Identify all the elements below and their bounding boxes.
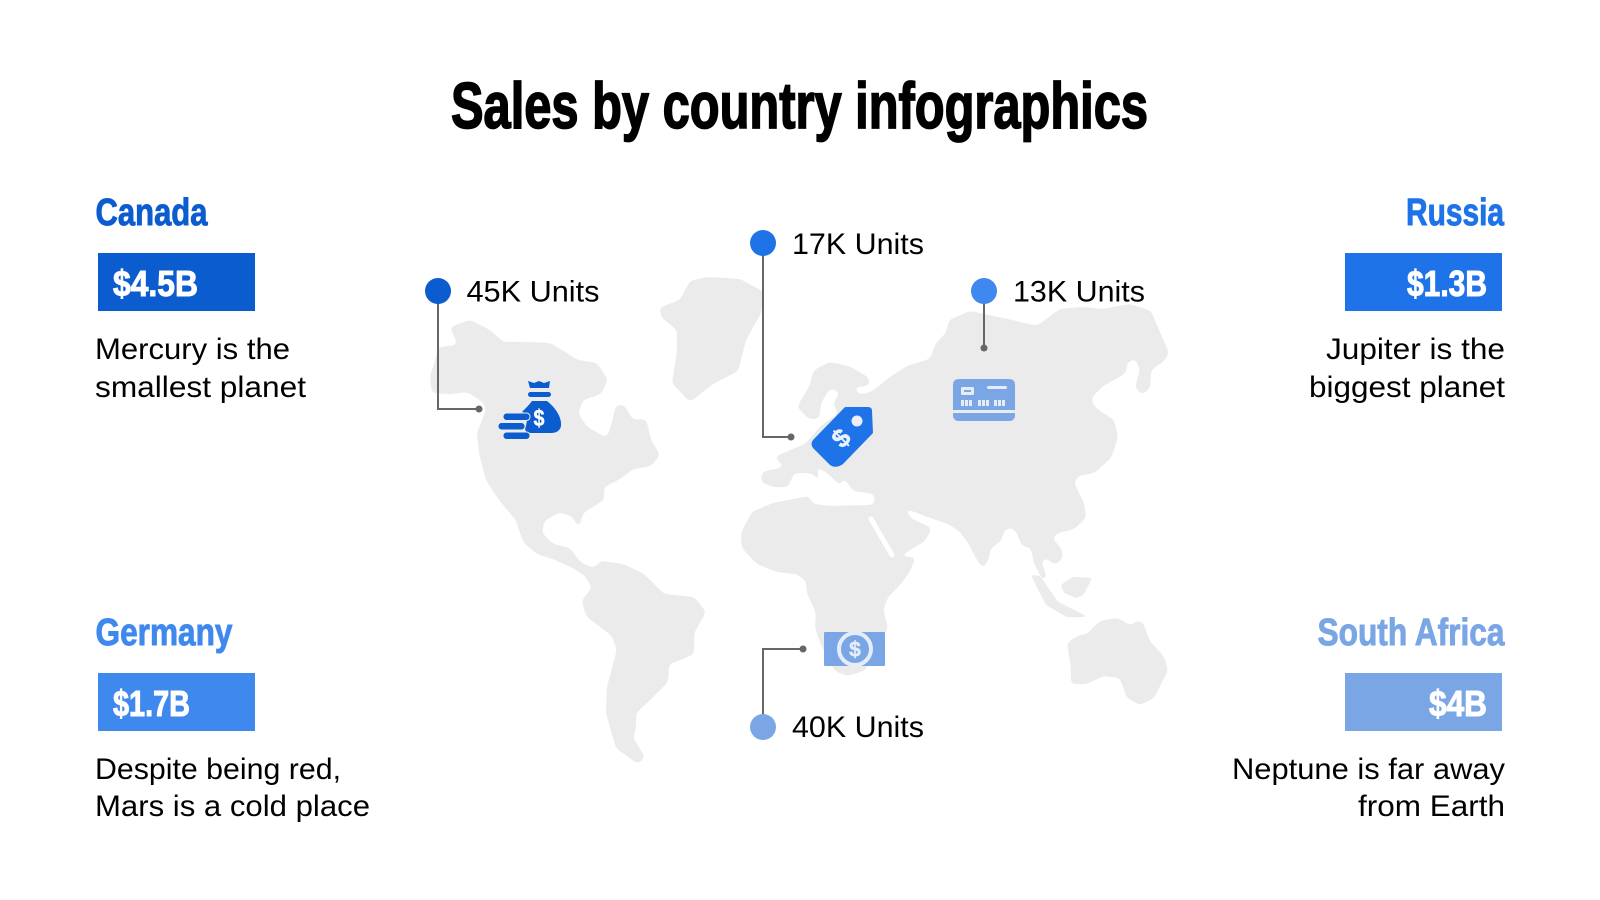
value bar: Russia (1345, 253, 1502, 311)
description: Germany (95, 753, 370, 823)
pin: 17K Units (750, 228, 924, 440)
title: Sales by country infographics (451, 69, 1148, 142)
value: $1.7B: $1.7B (113, 683, 190, 724)
icon: price tag (812, 407, 873, 467)
icon: price tag: $ (825, 422, 857, 454)
value: $4.5B: $4.5B (113, 263, 198, 304)
panel: Germany (95, 612, 370, 823)
pin: 17K Units: 17K Units (792, 228, 924, 261)
map: North America (430, 320, 660, 580)
description: Russia: biggest planet (1309, 371, 1506, 404)
description: Russia: Jupiter is the (1326, 333, 1505, 366)
map: Greenland (659, 277, 764, 402)
heading: Germany: Germany (96, 612, 232, 654)
pin: 45K Units: 45K Units (466, 276, 600, 308)
pin: 40K Units: 40K Units (792, 711, 924, 744)
map: South America (582, 561, 706, 764)
panel: Canada (95, 192, 307, 404)
icon: banknote: $ (849, 638, 861, 662)
panel: South Africa (1232, 612, 1505, 823)
world map (430, 277, 1169, 764)
description: Russia (1309, 333, 1506, 404)
description: Canada: Mercury is the (95, 333, 290, 366)
pin: 13K Units: 13K Units (1013, 276, 1145, 308)
description: Germany: Despite being red, (95, 753, 341, 786)
heading: Canada: Canada (96, 192, 208, 234)
panel: Russia (1309, 192, 1506, 404)
description: Canada: smallest planet (95, 371, 307, 404)
description: South Africa (1232, 753, 1505, 823)
map: Red Sea (871, 519, 892, 555)
heading: South Africa: South Africa (1318, 612, 1505, 654)
pin: 40K Units (750, 646, 924, 744)
icon: money bag and coins: $ (534, 405, 545, 431)
value bar: Germany (98, 673, 255, 731)
value: $1.3B: $1.3B (1407, 263, 1487, 304)
icon: credit card (953, 379, 1015, 421)
map: Sumatra and Java (1031, 575, 1088, 617)
map: Australia (1067, 618, 1168, 705)
description: South Africa: from Earth (1358, 790, 1505, 823)
icon: banknote (824, 632, 885, 666)
description: Germany: Mars is a cold place (95, 790, 370, 823)
map: Eurasia and Africa (741, 304, 1169, 676)
pin: 45K Units (425, 276, 600, 412)
value: $4B: $4B (1429, 683, 1487, 724)
heading: Russia: Russia (1406, 192, 1505, 234)
description: South Africa: Neptune is far away (1232, 753, 1505, 786)
value bar: South Africa (1345, 673, 1502, 731)
value bar: Canada (98, 253, 255, 311)
description: Canada (95, 333, 307, 404)
map: Borneo (1061, 577, 1092, 598)
icon: money bag and coins (498, 381, 561, 440)
pin: 13K Units (971, 276, 1145, 352)
